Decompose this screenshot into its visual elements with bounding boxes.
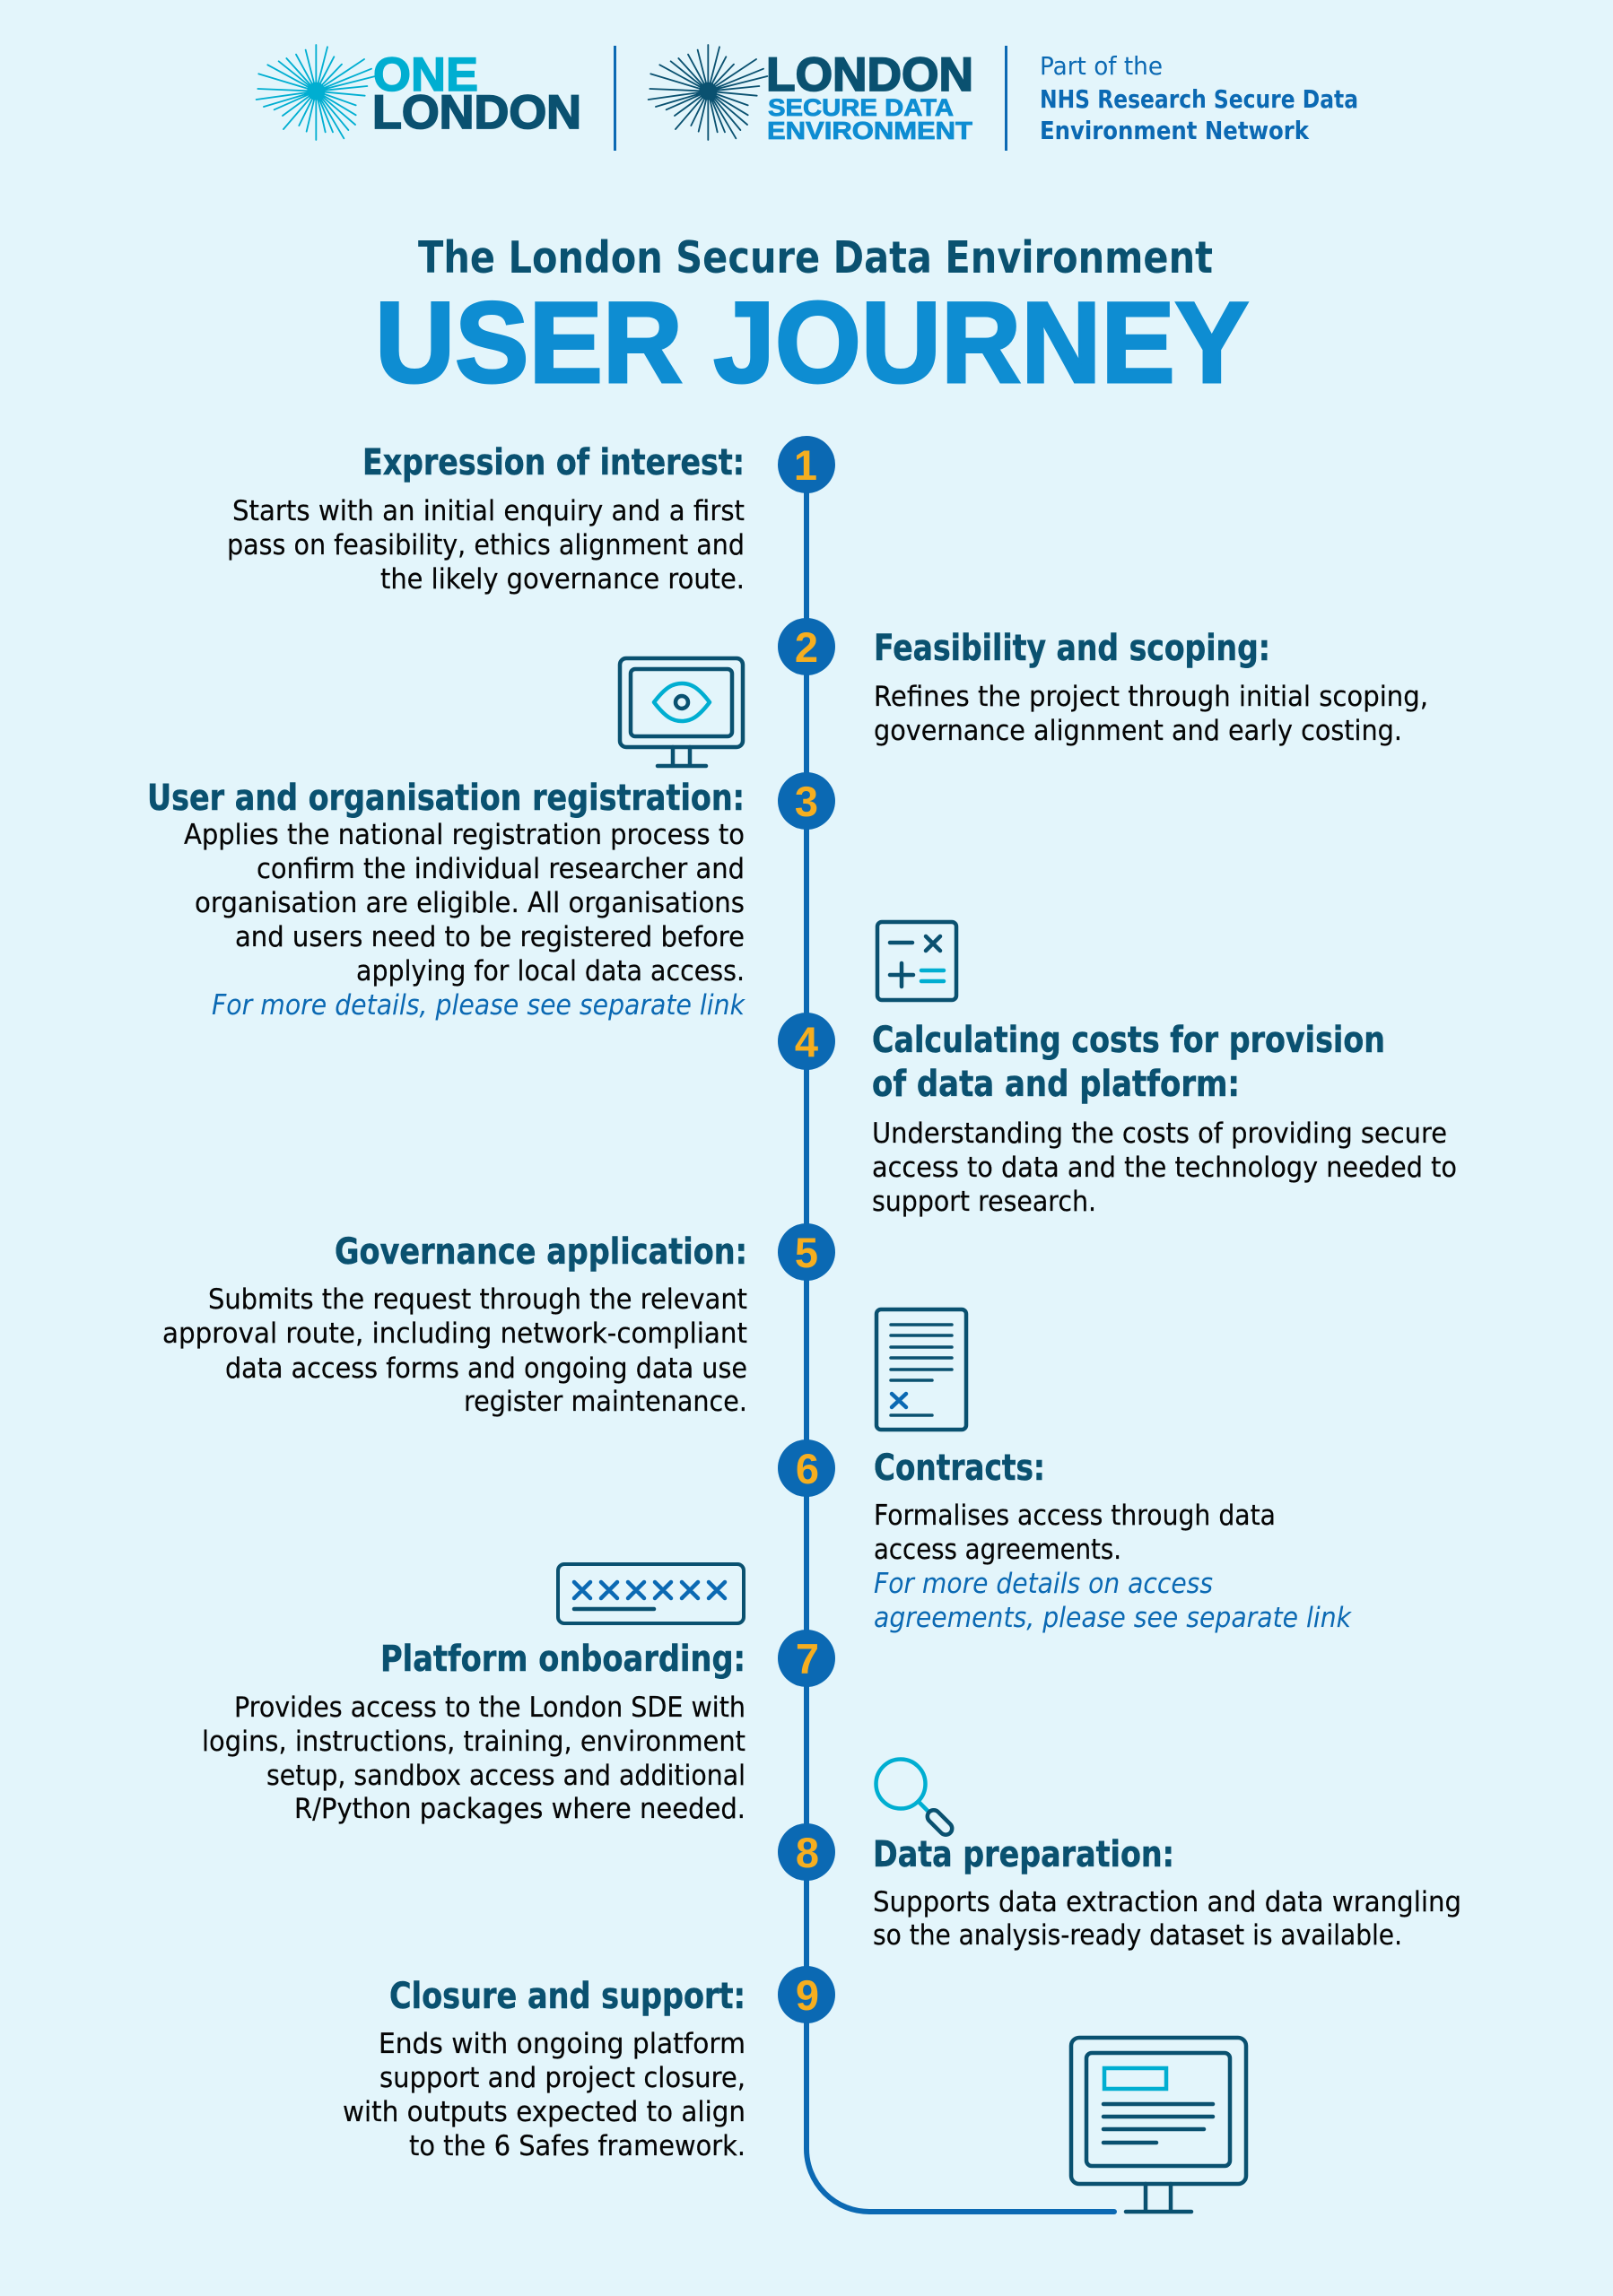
description: [202, 1692, 745, 1825]
description: [343, 2028, 745, 2162]
heading: Expression of interest:: [362, 442, 745, 483]
link note: For more details on access: [874, 1568, 1213, 1600]
number badge 4: [778, 1013, 835, 1070]
heading: User and organisation registration:: [147, 778, 745, 819]
description: [227, 495, 745, 596]
network statement: Environment Network: [1040, 116, 1310, 145]
heading: of data and platform:: [872, 1064, 1240, 1105]
step 3: user and organisation registration: [147, 772, 835, 1022]
icon: dark starburst: [649, 45, 767, 140]
icon: cyan starburst: [257, 45, 375, 140]
number badge 1: 1: [794, 441, 817, 489]
number badge 5: 5: [795, 1229, 818, 1276]
step 9: closure and support: [343, 1966, 1246, 2212]
description: [184, 819, 745, 987]
number badge 6: [778, 1439, 835, 1497]
step 1: expression of interest: [227, 436, 835, 596]
step 6: contracts: [778, 1309, 1352, 1634]
number badge 3: 3: [795, 778, 818, 825]
number badge 4: 4: [795, 1018, 818, 1065]
number badge 7: [778, 1630, 835, 1687]
number badge 9: [778, 1966, 835, 2023]
step 8: data preparation: [778, 1760, 1461, 1952]
number badge 2: 2: [795, 623, 818, 671]
description: [873, 1886, 1461, 1952]
description: Understanding the costs of providing secure: [872, 1118, 1447, 1150]
icon: magnifying glass: [876, 1760, 955, 1838]
description: Provides access to the London SDE with: [234, 1692, 745, 1724]
description: with outputs expected to align: [343, 2096, 745, 2128]
step 7: platform onboarding: [202, 1564, 835, 1825]
description: so the analysis-ready dataset is available.: [873, 1919, 1402, 1952]
icon: calculator: [877, 922, 956, 1000]
description: setup, sandbox access and additional: [266, 1760, 745, 1792]
link note: For more details, please see separate link: [212, 989, 745, 1022]
heading: Calculating costs for provision: [872, 1020, 1385, 1061]
step 4: calculating costs: [778, 922, 1457, 1218]
subtitle: The London Secure Data Environment: [418, 232, 1213, 283]
number badge 1: [778, 436, 835, 493]
description: Supports data extraction and data wrangling: [873, 1886, 1461, 1918]
timeline line: [806, 465, 1114, 2212]
step 5: governance application: [162, 1223, 835, 1418]
heading: Data preparation:: [873, 1834, 1174, 1875]
description: governance alignment and early costing.: [874, 715, 1402, 747]
description: and users need to be registered before: [235, 921, 745, 953]
description: [874, 681, 1428, 747]
icon: contract document: [876, 1309, 966, 1430]
description: register maintenance.: [464, 1386, 747, 1418]
network statement: Part of the: [1040, 51, 1163, 81]
heading: [872, 1020, 1385, 1105]
description: access agreements.: [874, 1534, 1121, 1566]
description: the likely governance route.: [380, 563, 745, 596]
description: support research.: [872, 1186, 1096, 1218]
heading: Governance application:: [335, 1231, 747, 1273]
heading: Platform onboarding:: [380, 1639, 745, 1680]
description: [872, 1118, 1457, 1218]
description: R/Python packages where needed.: [294, 1793, 745, 1825]
description: access to data and the technology needed to: [872, 1152, 1457, 1184]
number badge 7: 7: [796, 1635, 819, 1683]
heading: Feasibility and scoping:: [874, 628, 1270, 669]
description: logins, instructions, training, environment: [202, 1726, 745, 1758]
logo wordmark: SECURE DATA: SECURE DATA: [768, 94, 954, 121]
logo: London Secure Data Environment: [649, 45, 973, 144]
number badge 5: [778, 1223, 835, 1281]
description: [162, 1283, 747, 1418]
header logos: [257, 45, 1358, 151]
description: support and project closure,: [379, 2062, 745, 2094]
description: data access forms and ongoing data use: [225, 1352, 747, 1385]
heading: Contracts:: [874, 1448, 1045, 1489]
logo wordmark: LONDON: LONDON: [372, 86, 581, 139]
description: Refines the project through initial scoping,: [874, 681, 1428, 713]
link note: agreements, please see separate link: [874, 1602, 1352, 1634]
main title: USER JOURNEY: [375, 279, 1249, 407]
description: [874, 1500, 1276, 1566]
number badge 6: 6: [796, 1445, 819, 1492]
number badge 8: [778, 1823, 835, 1881]
heading: Closure and support:: [389, 1976, 745, 2017]
icon: monitor with document: [1071, 2038, 1246, 2212]
description: Ends with ongoing platform: [379, 2028, 745, 2060]
number badge 9: 9: [796, 1971, 819, 2019]
description: Formalises access through data: [874, 1500, 1276, 1532]
logo wordmark: LONDON: LONDON: [766, 48, 973, 101]
number badge 8: 8: [796, 1829, 819, 1876]
logo wordmark: ONE: ONE: [373, 48, 478, 101]
description: pass on feasibility, ethics alignment and: [227, 529, 745, 561]
step 2: feasibility and scoping: [620, 618, 1428, 766]
description: Applies the national registration process to: [184, 819, 745, 851]
description: approval route, including network-compliant: [162, 1318, 747, 1350]
icon: monitor with eye: [620, 658, 743, 766]
number badge 2: [778, 618, 835, 675]
network statement: NHS Research Secure Data: [1040, 84, 1358, 114]
description: Submits the request through the relevant: [208, 1283, 747, 1316]
description: confirm the individual researcher and: [257, 853, 745, 885]
description: Starts with an initial enquiry and a first: [232, 495, 745, 527]
description: to the 6 Safes framework.: [409, 2130, 745, 2162]
network statement: [1040, 51, 1358, 145]
number badge 3: [778, 772, 835, 830]
description: organisation are eligible. All organisations: [195, 887, 745, 919]
link note: [874, 1568, 1352, 1634]
logo: One London: [257, 45, 581, 140]
logo wordmark: ENVIRONMENT: ENVIRONMENT: [767, 117, 972, 144]
description: applying for local data access.: [356, 955, 745, 987]
title block: [375, 232, 1249, 407]
divider two: [1005, 46, 1007, 151]
divider one: [614, 46, 616, 151]
icon: password field: [558, 1564, 744, 1623]
